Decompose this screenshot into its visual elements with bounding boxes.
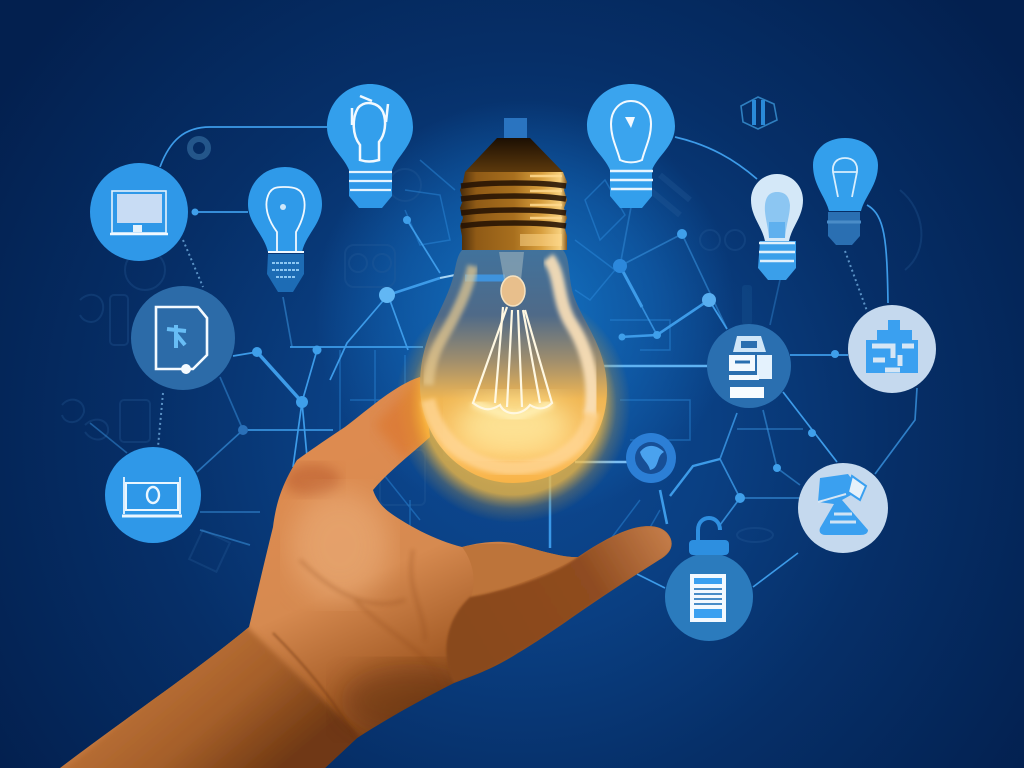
icon: small hexagon badge <box>741 97 777 129</box>
icon: document circle <box>131 286 235 390</box>
icon: bulb far right <box>813 138 878 245</box>
icon: bottle circle <box>707 324 791 408</box>
heel shadow <box>334 656 454 732</box>
dark ring icon <box>190 139 208 157</box>
blue link through glass <box>465 274 505 282</box>
network nodes <box>192 208 839 503</box>
filament bead <box>501 276 525 306</box>
hand <box>60 377 672 768</box>
icon: maze circle <box>848 305 936 393</box>
icon: bulb left <box>248 167 322 292</box>
thumb shading <box>376 384 425 460</box>
stem <box>499 252 524 280</box>
icon: bulb top left <box>327 84 413 208</box>
bottom rim light <box>428 400 592 468</box>
forearm <box>71 626 360 768</box>
filament <box>473 307 552 413</box>
long finger <box>446 526 672 683</box>
hand base shape <box>60 377 672 768</box>
inner hot glow <box>455 395 571 455</box>
copper base <box>460 172 567 250</box>
icon: flask circle <box>798 463 888 553</box>
base cap <box>465 138 563 172</box>
base highlights <box>520 176 562 240</box>
icon: white bulb right <box>751 174 803 280</box>
curled fingers <box>462 544 578 586</box>
faint background icons <box>62 169 921 572</box>
icon: laptop circle <box>90 163 188 261</box>
light bulb <box>395 118 631 523</box>
knuckle redness <box>284 464 340 496</box>
glass <box>420 250 607 483</box>
blue glow behind bulb <box>300 90 750 530</box>
base threads <box>461 183 566 226</box>
circuit clusters near bulb <box>340 160 690 545</box>
icon: bulb top right <box>587 84 675 208</box>
right rim light <box>548 258 592 415</box>
left rim light <box>428 266 473 385</box>
palm creases <box>300 551 422 626</box>
filament glow <box>473 403 552 418</box>
network lines <box>90 127 917 588</box>
glow <box>395 287 631 523</box>
wrist crease <box>272 632 342 716</box>
icon: monitor circle <box>105 447 201 543</box>
palm highlight <box>290 490 390 600</box>
icon: padlock document circle <box>665 518 753 641</box>
icon: small globe circle <box>626 433 676 483</box>
base tip <box>504 118 527 138</box>
dotted connectors <box>158 240 867 447</box>
